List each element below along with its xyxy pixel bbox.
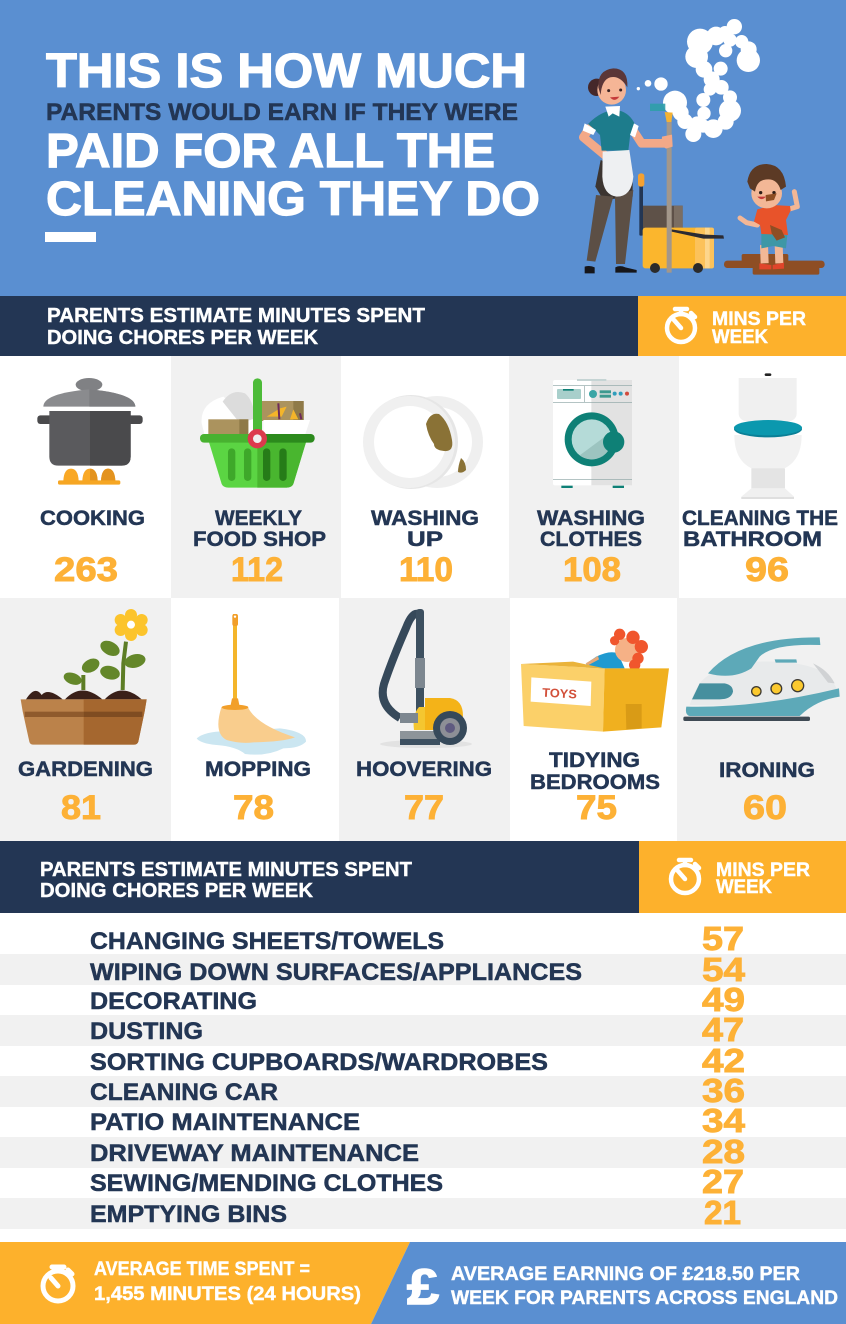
title: CLEANING THEY DO (46, 173, 540, 226)
text: AVERAGE TIME SPENT = (94, 1259, 310, 1280)
icon: stopwatch (43, 1267, 73, 1301)
row: sorting cupboards (90, 1042, 745, 1079)
row: cleaning car (90, 1072, 745, 1109)
row: patio maintenance: PATIO MAINTENANCE (90, 1109, 360, 1136)
icon: toilet (734, 373, 802, 499)
row: decorating: DECORATING (90, 988, 257, 1015)
chore tile: cleaning the bathroom (682, 373, 838, 589)
row: dusting: 47 (702, 1011, 744, 1048)
section heading (47, 305, 425, 349)
row: patio maintenance: 34 (702, 1102, 746, 1139)
row: driveway maintenance: 28 (702, 1133, 745, 1170)
label: GARDENING (18, 757, 153, 781)
row: sorting cupboards: SORTING CUPBOARDS/WARDROBES (90, 1049, 548, 1076)
title (46, 45, 540, 226)
label: BATHROOM (683, 527, 822, 551)
chore tile: mopping (197, 614, 311, 827)
icon: toy box (521, 629, 669, 732)
label: BEDROOMS (530, 770, 660, 794)
title: THIS IS HOW MUCH (46, 45, 527, 98)
text: AVERAGE EARNING OF £218.50 PER (451, 1264, 800, 1285)
row: sewing: 27 (702, 1163, 744, 1200)
icon: stopwatch (667, 309, 695, 342)
icon: cooking pot (37, 378, 143, 485)
section header: top chores (0, 296, 846, 356)
row: wiping down: WIPING DOWN SURFACES/APPLIANCES (90, 959, 582, 986)
value: 81 (61, 789, 101, 827)
muddy child figure (724, 164, 825, 275)
value: 60 (743, 789, 787, 827)
row: changing sheets (90, 920, 744, 957)
column label: WEEK (712, 327, 768, 348)
row: wiping down (90, 951, 746, 988)
title: PARENTS WOULD EARN IF THEY WERE (46, 99, 518, 126)
label: TIDYING (549, 748, 640, 772)
icon: vacuum cleaner (380, 609, 472, 748)
footer: average time spent (0, 1242, 410, 1324)
section heading: DOING CHORES PER WEEK (40, 880, 314, 902)
chore tile: gardening (0, 598, 171, 841)
icon: toy box: TOYS (542, 686, 577, 701)
chore tile: ironing (677, 598, 846, 841)
row: wiping down: 54 (702, 951, 746, 988)
value: 96 (745, 551, 789, 589)
value: 108 (563, 551, 621, 589)
row: decorating (90, 981, 745, 1018)
value: 112 (231, 551, 283, 589)
label: IRONING (719, 758, 815, 782)
chore tile: tidying bedrooms (521, 629, 669, 827)
section heading: PARENTS ESTIMATE MINUTES SPENT (40, 859, 412, 881)
illustration: parent, mop bucket, muddy child and dollar bubbles (583, 19, 825, 275)
icon: pound sign: £ (407, 1259, 439, 1315)
column label (712, 309, 806, 348)
footer: average earning (371, 1242, 846, 1324)
row: dusting: DUSTING (90, 1018, 203, 1045)
value: 78 (233, 789, 274, 827)
chore tile: weekly food shop (171, 356, 341, 598)
chore tile: washing up (363, 395, 483, 589)
row: dusting (90, 1011, 744, 1048)
section heading: PARENTS ESTIMATE MINUTES SPENT (47, 305, 425, 327)
title underline bar (45, 232, 96, 242)
icon: plant pot with flower (21, 609, 148, 745)
label: CLOTHES (540, 527, 642, 551)
row: driveway maintenance (90, 1133, 745, 1170)
column label: WEEK (716, 877, 772, 898)
text: WEEK FOR PARENTS ACROSS ENGLAND (451, 1288, 838, 1309)
label (193, 506, 326, 551)
label: WASHING (537, 506, 645, 530)
row: changing sheets: CHANGING SHEETS/TOWELS (90, 928, 444, 955)
section header: other chores (0, 841, 846, 913)
header panel (0, 0, 846, 296)
label: UP (407, 527, 443, 551)
section heading: DOING CHORES PER WEEK (47, 327, 319, 349)
label: COOKING (40, 506, 145, 530)
row: cleaning car: 36 (702, 1072, 745, 1109)
icon: steam iron (683, 637, 840, 721)
row: sewing (90, 1163, 744, 1200)
chore tile: hoovering (339, 598, 510, 841)
row: sorting cupboards: 42 (702, 1042, 745, 1079)
column label (716, 860, 810, 898)
label: WASHING (371, 506, 479, 530)
label (530, 748, 660, 794)
chores list (0, 920, 846, 1231)
dollar sign bubbles (637, 19, 760, 142)
icon: shopping basket (200, 378, 315, 488)
icon: stopwatch (671, 860, 699, 893)
column label: MINS PER (712, 309, 806, 330)
icon: mop and puddle (197, 614, 306, 755)
chore tile: washing clothes (509, 356, 679, 598)
text: 1,455 MINUTES (24 HOURS) (94, 1284, 361, 1305)
text (451, 1264, 838, 1309)
label: HOOVERING (356, 757, 492, 781)
section heading (40, 859, 412, 902)
row: changing sheets: 57 (702, 920, 744, 957)
title: PAID FOR ALL THE (46, 125, 495, 178)
row: emptying bins: EMPTYING BINS (90, 1201, 287, 1228)
row: decorating: 49 (702, 981, 745, 1018)
value: 77 (404, 789, 444, 827)
mop pole (650, 104, 673, 273)
text (94, 1259, 361, 1305)
icon: dirty plates (363, 395, 483, 489)
row: emptying bins: 21 (704, 1194, 741, 1231)
row: emptying bins (90, 1194, 741, 1231)
label (682, 506, 838, 551)
label (537, 506, 645, 551)
label: WEEKLY (215, 506, 302, 530)
chore tile: cooking (37, 378, 145, 589)
value: 110 (399, 551, 453, 589)
icon: washing machine (553, 379, 632, 488)
mop bucket (638, 173, 724, 273)
label (371, 506, 479, 551)
row: patio maintenance (90, 1102, 746, 1139)
value: 75 (576, 789, 617, 827)
label: FOOD SHOP (193, 527, 326, 551)
label: CLEANING THE (682, 506, 838, 530)
label: MOPPING (205, 757, 311, 781)
row: driveway maintenance: DRIVEWAY MAINTENANCE (90, 1140, 419, 1167)
row: sewing: SEWING/MENDING CLOTHES (90, 1170, 443, 1197)
column label: MINS PER (716, 860, 810, 881)
value: 263 (54, 551, 118, 589)
row: cleaning car: CLEANING CAR (90, 1079, 278, 1106)
parent figure (583, 68, 667, 273)
